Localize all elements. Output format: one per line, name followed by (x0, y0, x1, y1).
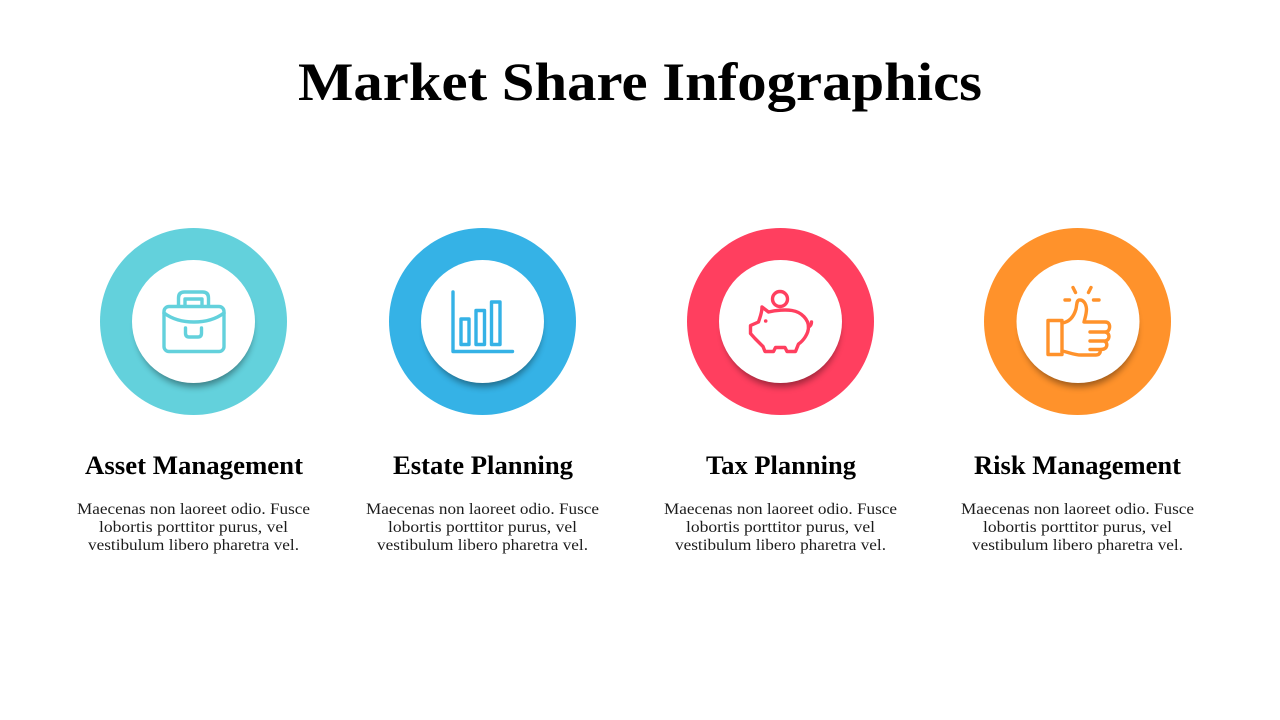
description: asset management (77, 501, 310, 554)
description: tax planning (664, 501, 897, 554)
panel: risk management (961, 228, 1194, 554)
panel: asset management (77, 228, 310, 554)
icon: piggy bank (750, 292, 812, 352)
description: asset management: Maecenas non laoreet odio. Fusce (77, 501, 310, 518)
heading: risk management: Risk Management (974, 451, 1181, 480)
heading: asset management: Asset Management (85, 451, 303, 480)
icon: briefcase (164, 292, 224, 352)
description: tax planning: lobortis porttitor purus, vel (686, 519, 876, 536)
description: asset management: lobortis porttitor purus, vel (99, 519, 289, 536)
description: tax planning: vestibulum libero pharetra vel. (675, 537, 886, 554)
description: tax planning: Maecenas non laoreet odio. Fusce (664, 501, 897, 518)
icon: thumbs up (1048, 288, 1110, 355)
icon: bar chart (453, 292, 512, 352)
panel: tax planning (664, 228, 897, 554)
title: Market Share Infographics (298, 52, 982, 112)
description: risk management: Maecenas non laoreet odio. Fusce (961, 501, 1194, 518)
icon badge: tax planning (687, 228, 874, 415)
icon: piggy eye (764, 319, 768, 323)
description: estate planning: lobortis porttitor purus, vel (388, 519, 578, 536)
icon badge: risk management (984, 228, 1171, 415)
description: risk management (961, 501, 1194, 554)
icon badge: estate planning (389, 228, 576, 415)
description: asset management: vestibulum libero pharetra vel. (88, 537, 299, 554)
description: estate planning (366, 501, 599, 554)
heading: estate planning: Estate Planning (393, 451, 573, 480)
description: risk management: lobortis porttitor purus, vel (983, 519, 1173, 536)
icon badge: asset management (100, 228, 287, 415)
description: estate planning: vestibulum libero pharetra vel. (377, 537, 588, 554)
description: risk management: vestibulum libero pharetra vel. (972, 537, 1183, 554)
heading: tax planning: Tax Planning (706, 451, 856, 480)
panel: estate planning (366, 228, 599, 554)
description: estate planning: Maecenas non laoreet odio. Fusce (366, 501, 599, 518)
